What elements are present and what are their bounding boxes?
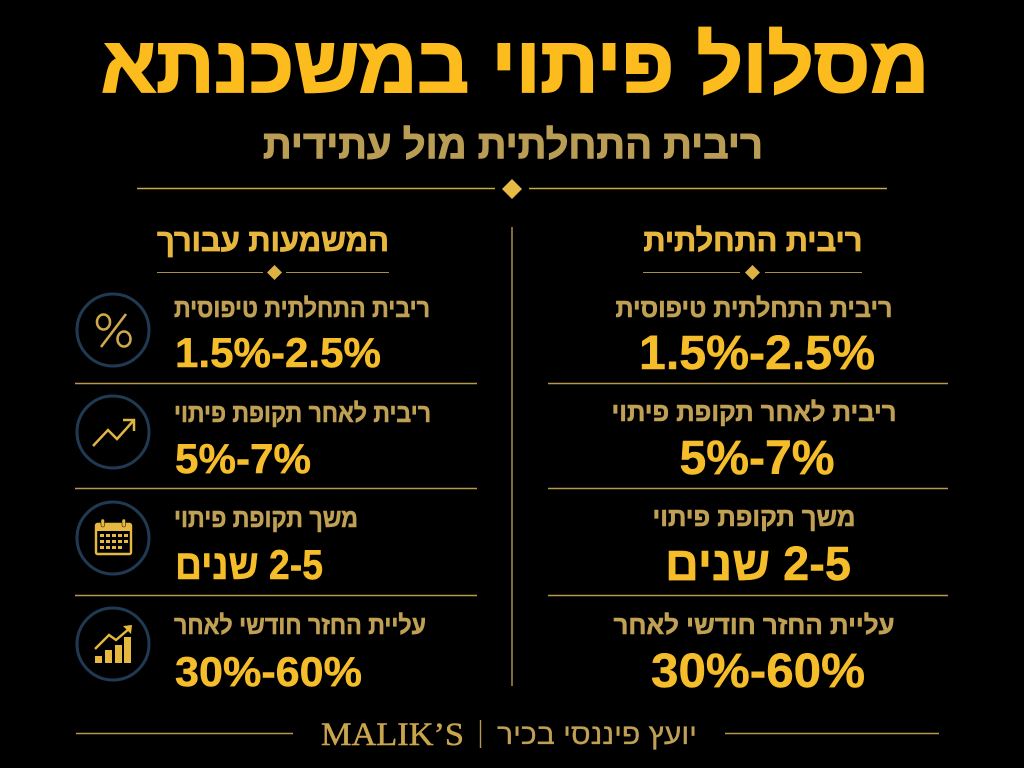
icon: calendar	[77, 502, 149, 574]
label: payment rise: עליית החזר חודשי לאחר	[174, 610, 426, 640]
top divider	[137, 179, 887, 199]
panel: right column, starting rate	[548, 223, 948, 698]
heading ornament right	[643, 265, 862, 280]
value: typical rate: 1.5%-2.5%	[639, 327, 875, 380]
label: typical starting rate: ריבית התחלתית טיפוסית	[616, 293, 892, 323]
value: payment rise: 30%-60%	[175, 648, 362, 695]
footer	[76, 717, 939, 753]
brand name: MALIK’S	[321, 717, 464, 753]
label: payment rise: עליית החזר חודשי לאחר	[614, 610, 894, 640]
value: duration: 2-5 שנים	[175, 541, 323, 588]
label: teaser duration: משך תקופת פיתוי	[652, 502, 856, 532]
heading: meaning for you: המשמעות עבורך	[157, 223, 389, 258]
value: typical rate: 1.5%-2.5%	[175, 329, 381, 376]
label: teaser duration: משך תקופת פיתוי	[174, 503, 358, 533]
icon: rising bars	[77, 608, 149, 680]
label: rate after teaser: ריבית לאחר תקופת פיתוי	[612, 397, 896, 427]
value: duration: 2-5 שנים	[665, 538, 851, 591]
subtitle: ריבית התחלתית מול עתידית	[263, 123, 763, 167]
value: later rate: 5%-7%	[680, 432, 834, 485]
heading ornament left	[157, 265, 389, 280]
label: rate after teaser: ריבית לאחר תקופת פיתוי	[174, 398, 431, 428]
icon: percent	[77, 294, 149, 366]
value: later rate: 5%-7%	[175, 435, 311, 482]
label: typical starting rate: ריבית התחלתית טיפוסית	[174, 293, 430, 323]
value: payment rise: 30%-60%	[651, 645, 865, 698]
title: מסלול פיתוי במשכנתא	[101, 20, 929, 109]
panel: left column, what it means for you	[75, 223, 477, 695]
icon: trend arrow	[77, 396, 149, 468]
heading: starting rate: ריבית התחלתית	[644, 223, 862, 258]
brand tagline: יועץ פיננסי בכיר	[497, 719, 697, 751]
